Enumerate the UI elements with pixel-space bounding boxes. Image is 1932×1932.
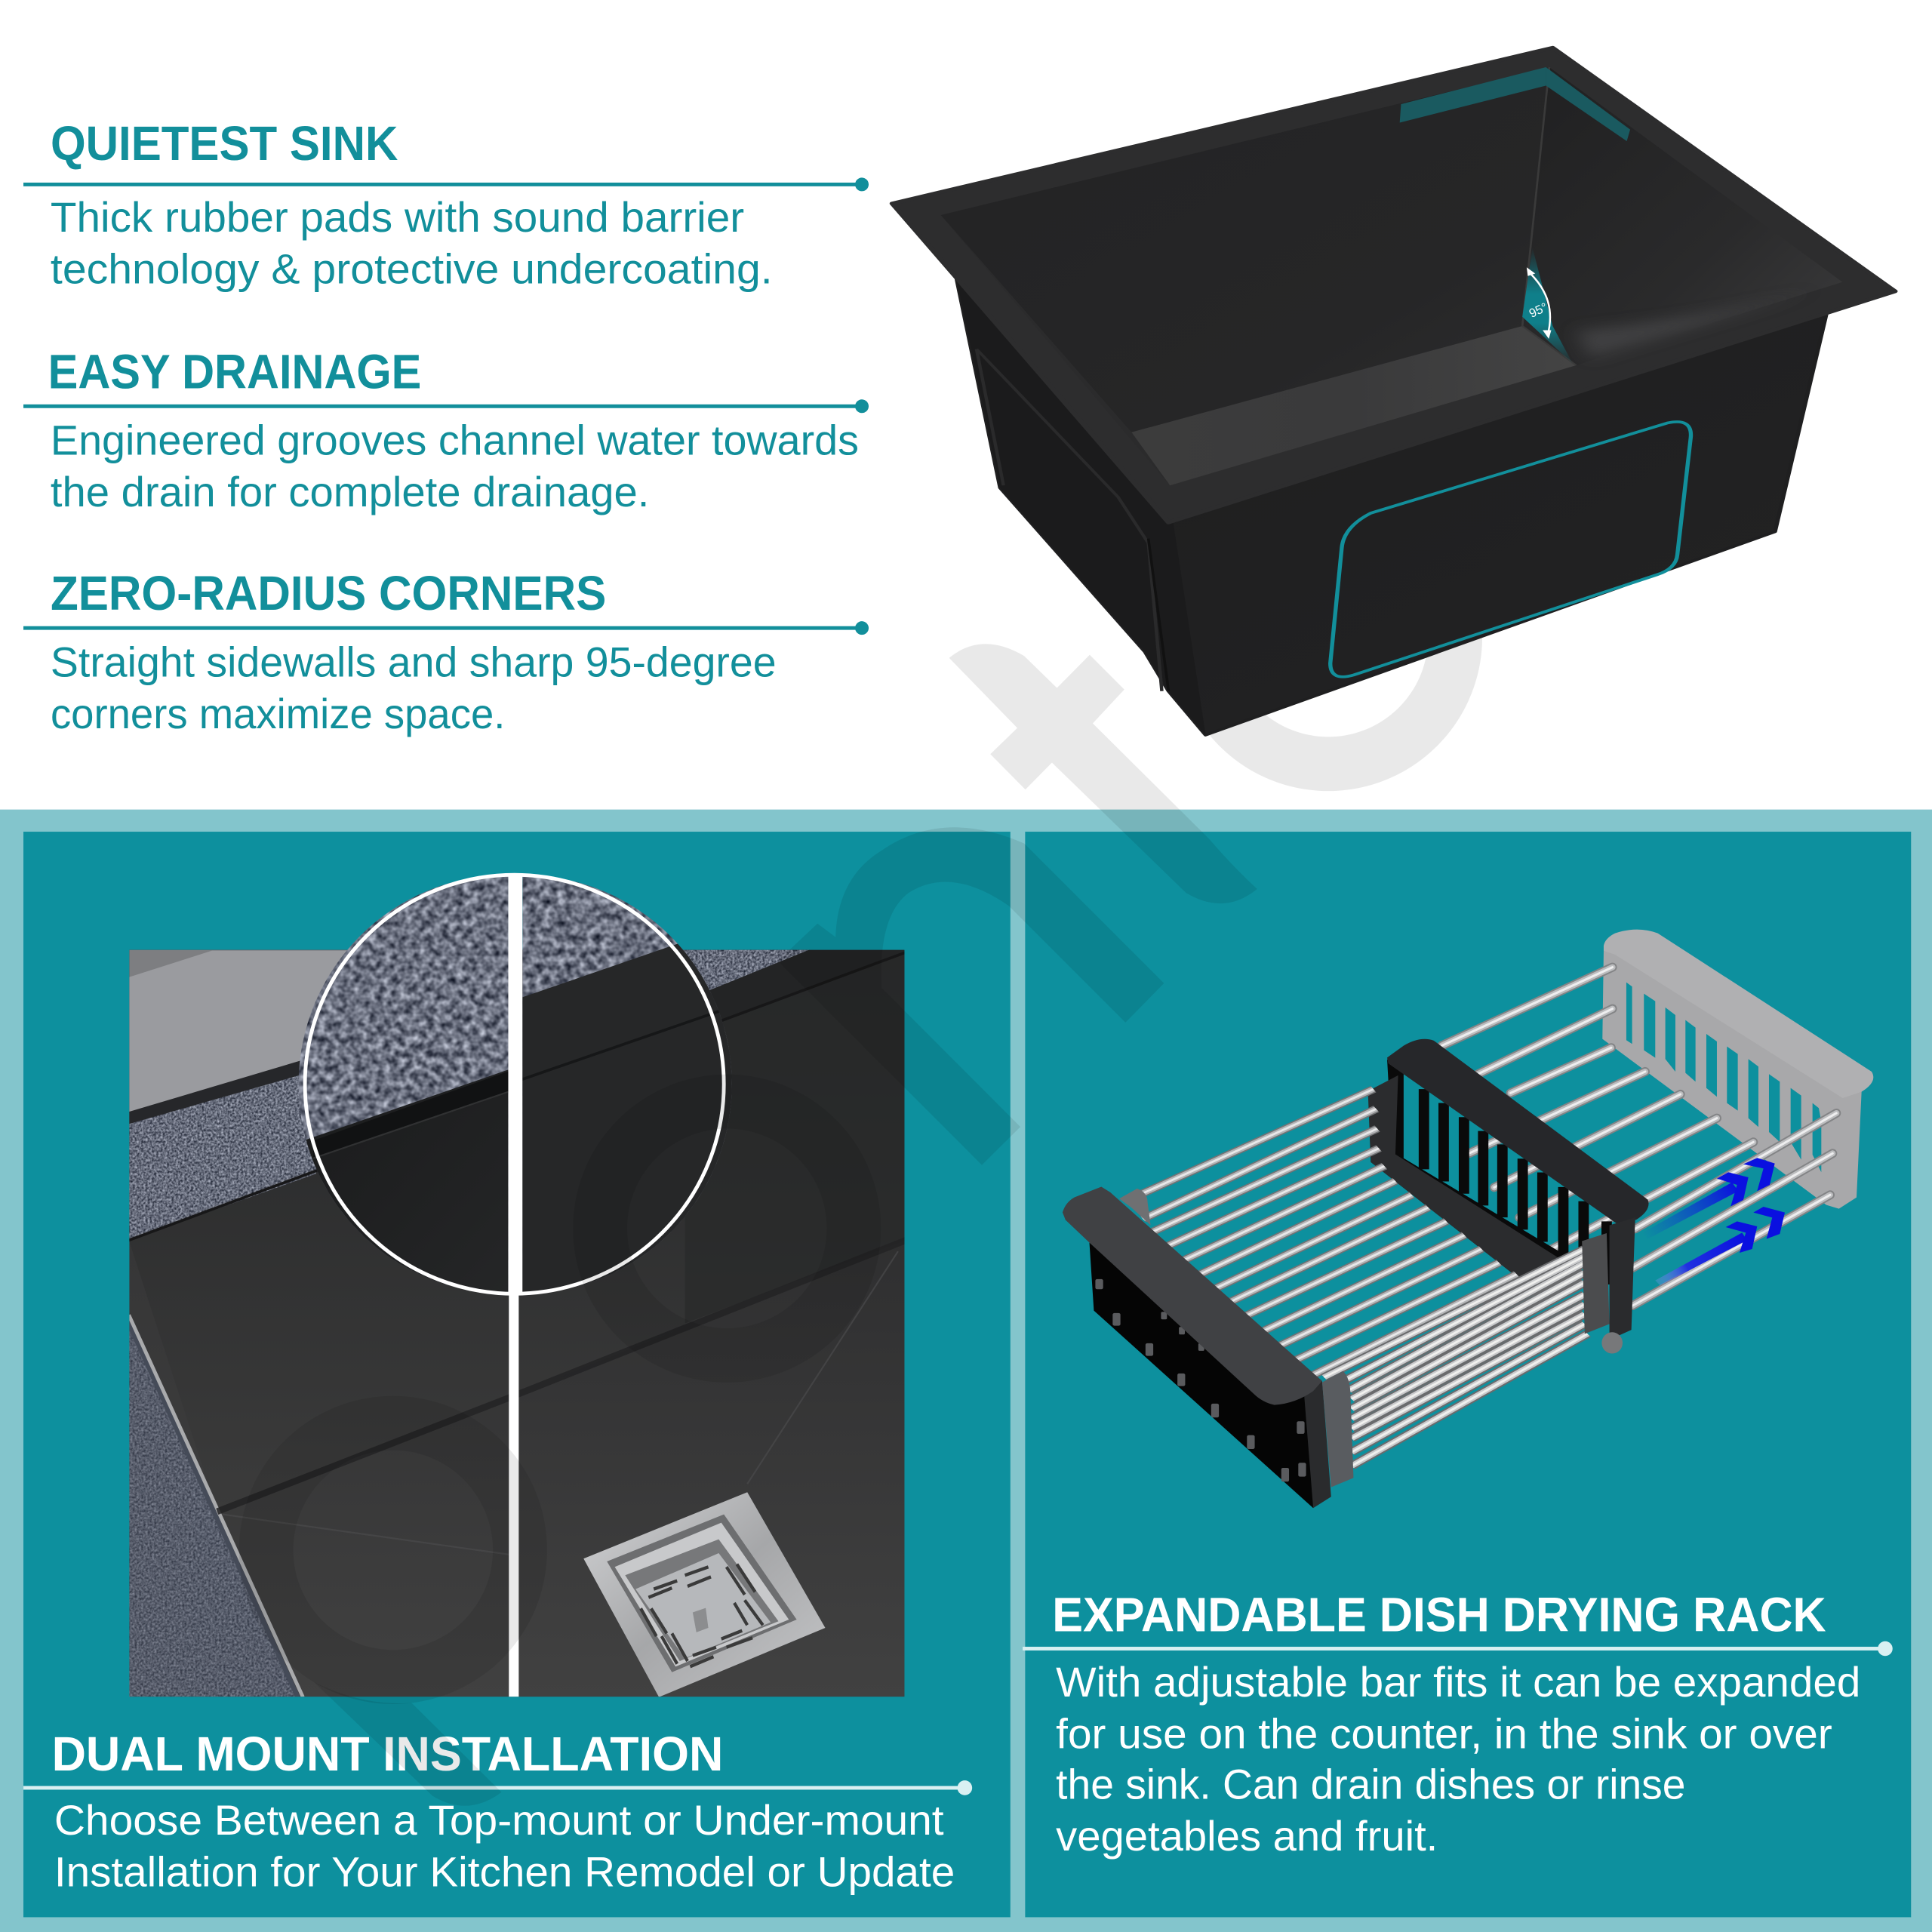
black middle frame: [1368, 1039, 1649, 1284]
text: rack description: [1056, 1659, 1860, 1860]
panel: feature list: [23, 117, 869, 737]
watermark letter behind sink: [1174, 483, 1482, 791]
vertical white divider: [509, 1294, 518, 1697]
diagonal watermark: [239, 644, 1257, 1806]
95 degree arrow and label: 95°: [1527, 300, 1549, 321]
near frame: [1063, 1187, 1353, 1508]
text: easy drainage description: Engineered grooves channel water towards: [51, 417, 859, 463]
magnified circle: [296, 863, 740, 1306]
sink interior: [941, 67, 1842, 485]
text: zero-radius description: Straight sidewalls and sharp 95-degree: [51, 638, 777, 685]
photo: sink close-up: [129, 947, 906, 1697]
heading: zero-radius corners: ZERO-RADIUS CORNERS: [51, 567, 606, 620]
text: rack description: for use on the counter, in the sink or over: [1056, 1711, 1832, 1758]
text: quietest sink description: technology & protective undercoating.: [51, 246, 773, 293]
sink body: [953, 261, 1832, 735]
95 degree arrow and label: [1527, 267, 1552, 339]
text: quietest sink description: [51, 194, 773, 293]
text: easy drainage description: [51, 417, 859, 515]
leader line with dot: [23, 1780, 972, 1795]
drain strainer: [583, 1492, 825, 1697]
lower rods: [1324, 1249, 1587, 1466]
text: easy drainage description: the drain for complete drainage.: [51, 469, 649, 515]
far rods: [1441, 968, 1836, 1306]
teal corner strips: [1400, 67, 1630, 141]
text: rack description: the sink. Can drain dishes or rinse: [1056, 1761, 1685, 1808]
teal corner highlight: [1522, 248, 1573, 364]
rubber pad outline: [1331, 422, 1690, 677]
heading: expandable rack: EXPANDABLE DISH DRYING RACK: [1052, 1589, 1826, 1642]
text: quietest sink description: Thick rubber pads with sound barrier: [51, 194, 744, 241]
heading: dual mount installation: DUAL MOUNT INSTALLATION: [52, 1727, 723, 1781]
sink flange: [892, 48, 1895, 522]
sink illustration: [892, 48, 1895, 735]
text: dual mount description: Choose Between a Top-mount or Under-mount: [54, 1797, 944, 1844]
dish rack illustration: [1063, 930, 1873, 1508]
leader line with dot: [23, 621, 869, 635]
panel: expandable rack: [1023, 832, 1911, 1917]
gray far frame: [1602, 930, 1873, 1209]
heading: easy drainage: EASY DRAINAGE: [48, 345, 421, 398]
text: rack description: vegetables and fruit.: [1056, 1813, 1438, 1860]
text: dual mount description: Installation for Your Kitchen Remodel or Update: [54, 1849, 955, 1896]
text: zero-radius description: corners maximize space.: [51, 691, 505, 737]
leader line with dot: [23, 399, 869, 413]
bottom band: [0, 810, 1932, 1932]
text: rack description: With adjustable bar fits it can be expanded: [1056, 1659, 1860, 1706]
blue expansion arrows: [1643, 1158, 1785, 1285]
panel: dual mount installation: [23, 832, 1011, 1917]
text: zero-radius description: [51, 638, 777, 737]
heading: quietest sink: QUIETEST SINK: [51, 117, 398, 171]
middle end plate and knob: [1582, 1217, 1635, 1354]
text: dual mount description: [54, 1797, 955, 1896]
leader line with dot: [1023, 1641, 1893, 1656]
upper rods: [1140, 1089, 1517, 1376]
leader line with dot: [23, 177, 869, 191]
